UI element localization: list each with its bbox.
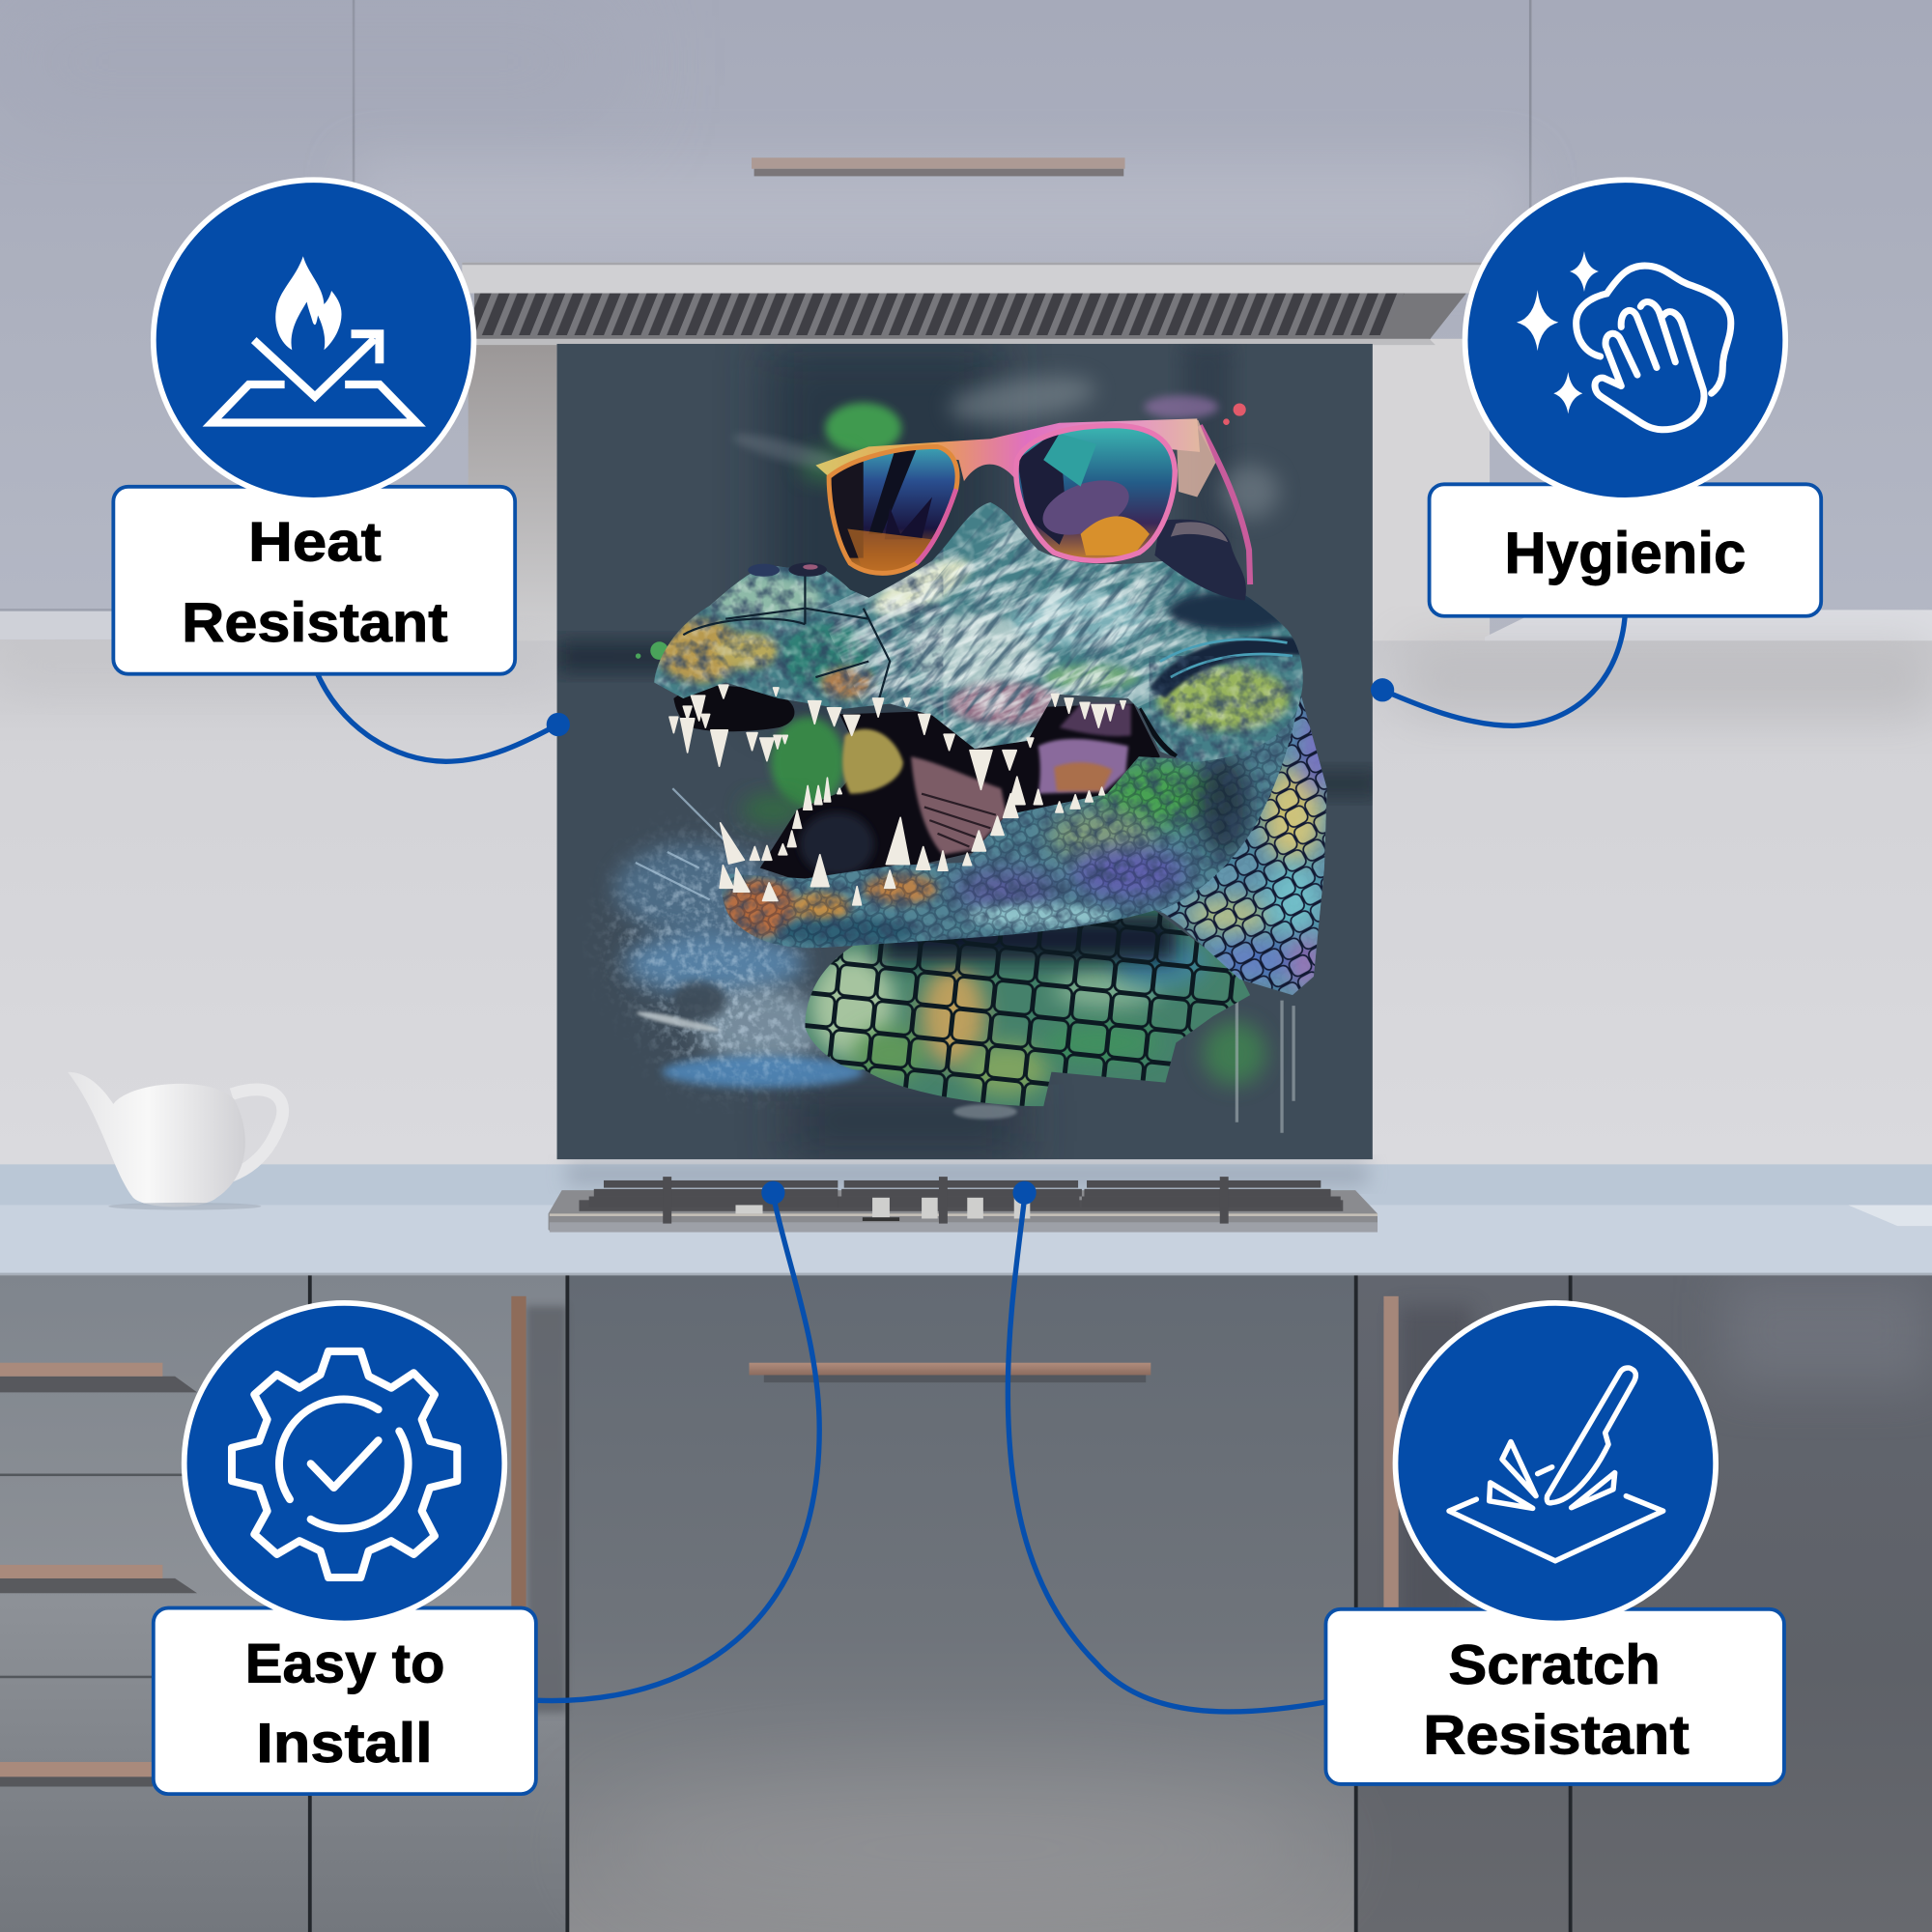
label box [154, 1608, 536, 1794]
label box [1325, 1609, 1784, 1784]
icon: knife scratching surface [1449, 1368, 1663, 1561]
callout: heat resistant [113, 180, 515, 674]
icon: flame over heat-proof surface [212, 256, 416, 423]
right lens [1011, 423, 1181, 566]
cabinet handles [0, 1296, 1399, 1786]
connector: scratch resistant [1008, 1181, 1328, 1712]
upper cabinets [0, 0, 1932, 640]
callout: scratch resistant [1325, 1303, 1784, 1784]
sunglasses [815, 418, 1250, 600]
label box [1430, 484, 1821, 616]
badge [185, 1303, 504, 1623]
label box: Scratch [1448, 1634, 1661, 1696]
callout: easy to install [154, 1303, 536, 1794]
connector: hygienic [1371, 612, 1625, 725]
teeth [669, 685, 1125, 905]
handle: upper cabinet [752, 157, 1125, 176]
panel base with reflections [557, 344, 1380, 1159]
upper head [654, 502, 1303, 762]
lower cabinets [0, 1275, 1932, 1932]
arm [1200, 425, 1250, 584]
cooktop [549, 1177, 1378, 1233]
label box: Install [256, 1713, 433, 1775]
mouth interior [673, 686, 1160, 881]
left lens [821, 441, 964, 582]
icon: gear with check mark [232, 1351, 457, 1577]
label box: Resistant [1423, 1705, 1690, 1767]
label box: Heat [248, 511, 382, 573]
top bar [815, 418, 1200, 481]
nostril bumps [748, 563, 827, 577]
badge [154, 180, 473, 500]
body scales [806, 910, 1250, 1107]
wall [0, 339, 1932, 1168]
connector: easy to install [535, 1181, 819, 1701]
crocodile artwork [614, 369, 1335, 1133]
panel: crocodile glass splashback [557, 344, 1380, 1159]
teapot [68, 1072, 283, 1210]
badge [1465, 180, 1785, 500]
connector: heat resistant [316, 669, 570, 761]
label box: Resistant [182, 592, 448, 654]
callout: hygienic [1430, 180, 1821, 616]
badge [1396, 1303, 1716, 1623]
icon: wiping hand with sparkles [1517, 251, 1731, 430]
paint splashes [614, 369, 1293, 1133]
label box: Easy to [245, 1634, 444, 1695]
range hood [462, 263, 1485, 345]
label box: Hygienic [1504, 521, 1746, 585]
neck scale texture [1160, 696, 1327, 995]
lower jaw and cheek [715, 693, 1335, 1011]
countertop [0, 1162, 1932, 1275]
head behind glasses [1154, 520, 1246, 600]
temple wedge [1176, 420, 1215, 497]
label box [113, 487, 515, 674]
